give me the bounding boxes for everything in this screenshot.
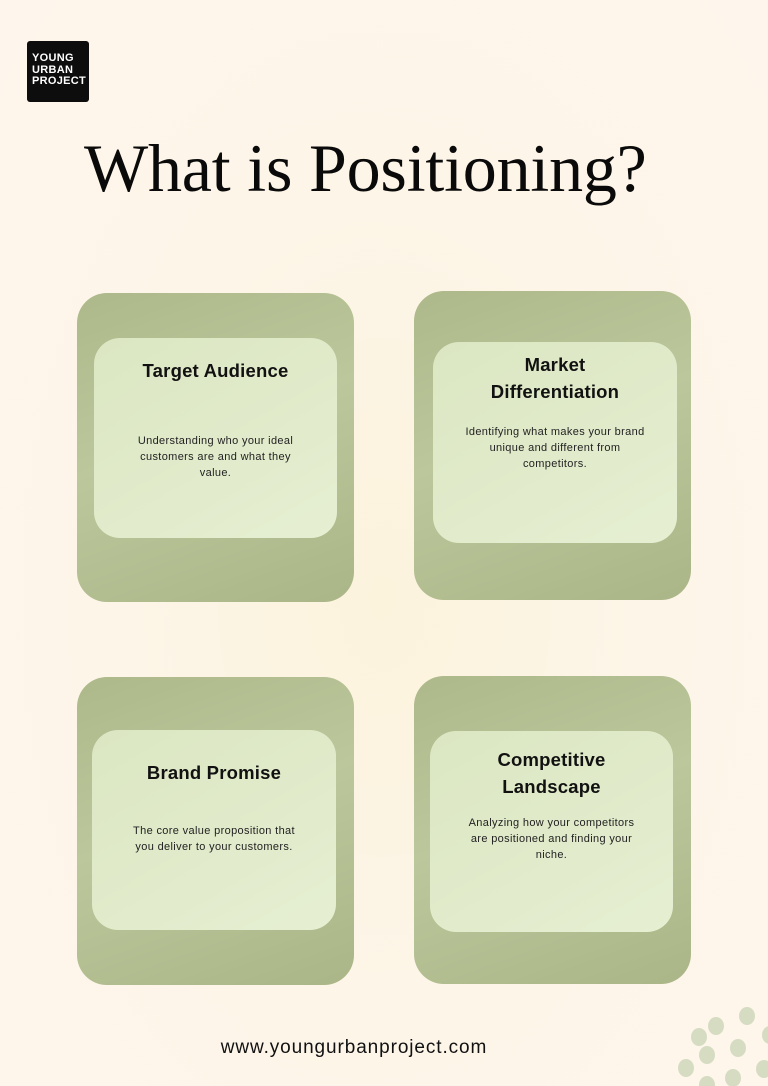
text: Understanding who your ideal customers are and what they value. — [138, 435, 293, 479]
footer url: www.youngurbanproject.com — [221, 1037, 487, 1058]
heading — [491, 354, 619, 402]
heading: Market — [525, 354, 585, 375]
card inner — [430, 731, 673, 932]
logo: PROJECT — [32, 75, 86, 87]
text: Identifying what makes your brand unique and different from competitors. — [465, 426, 645, 470]
title: What is Positioning? — [84, 130, 647, 206]
card: target audience inner — [94, 338, 337, 538]
heading: Competitive — [497, 749, 606, 770]
heading: Target Audience — [143, 360, 288, 381]
heading — [497, 749, 606, 797]
logo: YOUNG — [32, 52, 74, 64]
card inner — [92, 730, 336, 930]
card inner — [433, 342, 677, 543]
panel: brand promise — [77, 677, 354, 985]
panel: market differentiation — [414, 291, 691, 600]
heading: Differentiation — [491, 381, 619, 402]
logo: URBAN — [32, 64, 73, 76]
heading: Brand Promise — [147, 762, 281, 783]
heading: Landscape — [502, 776, 601, 797]
panel: competitive landscape — [414, 676, 691, 984]
logo — [27, 41, 89, 102]
text: Analyzing how your competitors are positioned and finding your niche. — [469, 817, 634, 861]
panel: target audience — [77, 293, 354, 602]
text: The core value proposition that you deliver to your customers. — [133, 825, 295, 853]
